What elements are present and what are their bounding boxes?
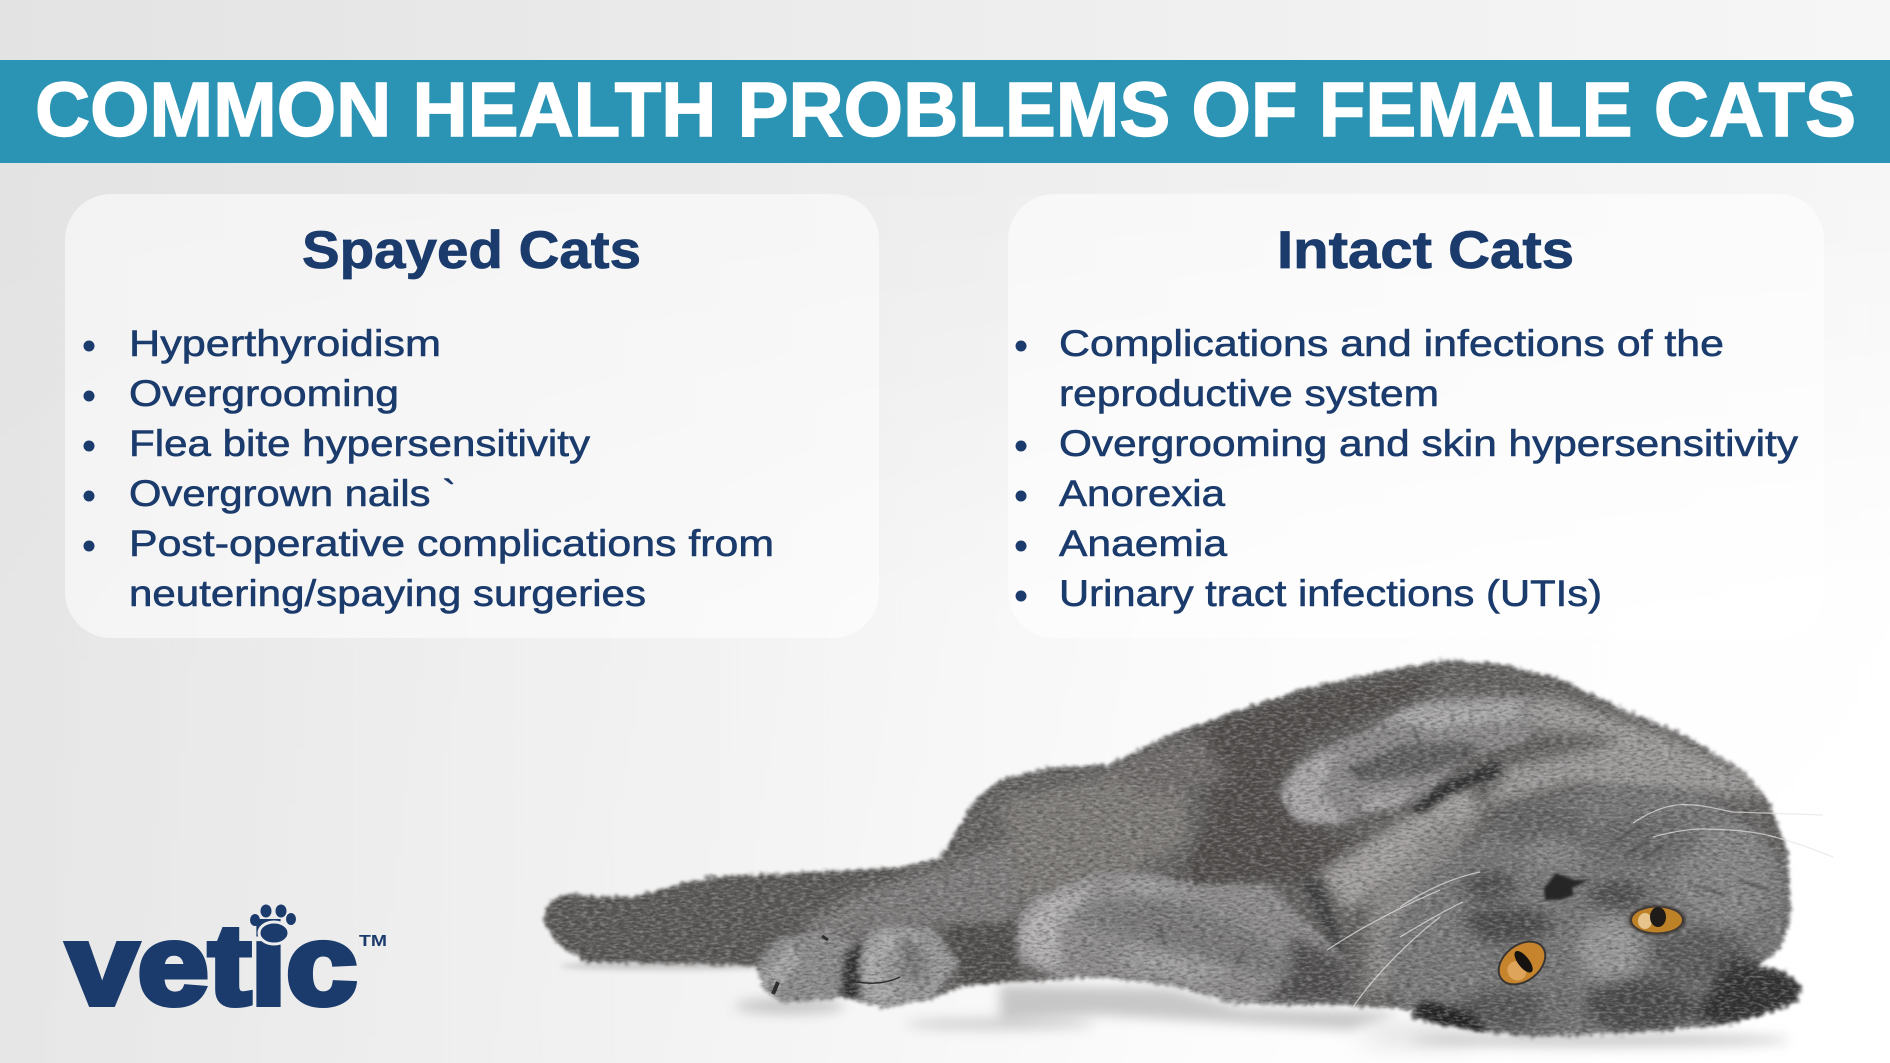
list: spayed cats problems: Hyperthyroidism	[129, 323, 441, 364]
icon: paw	[250, 904, 296, 944]
hind paw claws	[773, 936, 900, 994]
icon: cat lower eye	[1489, 931, 1555, 995]
list: intact cats problems: Urinary tract infections (UTIs)	[1059, 573, 1602, 614]
front paw	[1012, 872, 1350, 1003]
title banner: COMMON HEALTH PROBLEMS OF FEMALE CATS	[35, 67, 1856, 153]
tail	[545, 866, 898, 966]
list: spayed cats problems: Flea bite hypersensitivity	[129, 423, 591, 464]
list: spayed cats problems: Overgrooming	[129, 373, 399, 414]
cat details	[773, 725, 1833, 1007]
whiskers	[1327, 805, 1833, 1007]
logo: vetic: vetic	[67, 902, 357, 1028]
list: intact cats problems	[1016, 323, 1799, 614]
ears	[1690, 960, 1810, 1030]
heading: spayed cats: Spayed Cats	[302, 221, 641, 280]
floor shadow	[560, 962, 1790, 1047]
list: spayed cats problems: neutering/spaying surgeries	[129, 573, 646, 614]
list: intact cats problems: Anaemia	[1059, 523, 1227, 564]
list: spayed cats problems	[84, 323, 774, 614]
fur markings	[1160, 725, 1770, 965]
list: spayed cats problems: Post-operative complications from	[129, 523, 774, 564]
panel: spayed cats	[65, 194, 879, 638]
trademark: TM	[359, 933, 387, 950]
dark gap under raised paw	[1410, 760, 1500, 815]
list: intact cats problems: reproductive system	[1059, 373, 1439, 414]
icon: cat upper eye	[1629, 905, 1685, 935]
heading: intact cats: Intact Cats	[1277, 221, 1574, 280]
list: spayed cats problems: Overgrown nails `	[129, 473, 456, 514]
list: intact cats problems: Overgrooming and skin hypersensitivity	[1059, 423, 1799, 464]
panel: intact cats	[1008, 194, 1824, 638]
icon: cat nose	[1544, 873, 1590, 900]
hind legs upper	[802, 842, 1023, 940]
raised paw	[1280, 697, 1530, 823]
cat body and fur	[530, 660, 1810, 1037]
hind legs and paws	[943, 922, 1016, 985]
body shading	[1000, 670, 1768, 1000]
list: intact cats problems: Complications and infections of the	[1059, 323, 1724, 364]
list: intact cats problems: Anorexia	[1059, 473, 1225, 514]
head	[1388, 788, 1800, 1037]
cat illustration	[530, 660, 1833, 1047]
